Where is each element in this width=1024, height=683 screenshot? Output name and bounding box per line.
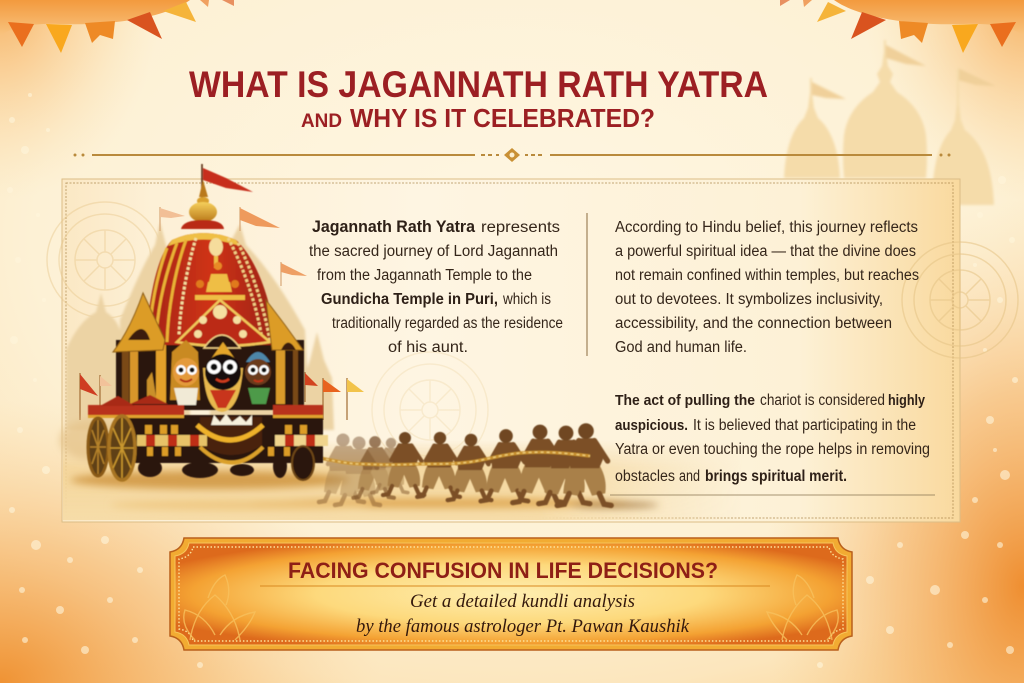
mandala: centre (372, 352, 488, 468)
dome (113, 233, 303, 352)
deity: Balabhadra (170, 340, 200, 405)
text block: pulling the chariot: and (679, 468, 700, 485)
faded pullers (319, 434, 380, 505)
text block: what it represents: the sacred journey of Lord Jagannath (309, 243, 558, 260)
mandala: right (902, 242, 1018, 358)
chariot flag (202, 164, 253, 200)
title line 1: WHAT IS JAGANNATH RATH YATRA (189, 64, 768, 105)
illustration: chariot (88, 164, 328, 480)
deity: Subhadra (245, 352, 271, 404)
text block: Hindu belief: According to Hindu belief, this journey reflects (615, 219, 918, 236)
temple silhouettes: top right (784, 40, 996, 205)
temple silhouettes behind chariot (66, 222, 334, 430)
text block: Hindu belief: a powerful spiritual idea — that the divine does (615, 243, 916, 260)
text block: what it represents: Jagannath Rath Yatra (312, 218, 476, 236)
banner heading: FACING CONFUSION IN LIFE DECISIONS? (288, 558, 718, 583)
ornamental divider (74, 148, 950, 162)
panel: main content frame (62, 179, 960, 522)
text block: what it represents: from the Jagannath Temple to the (317, 267, 532, 284)
text block: what it represents (309, 218, 563, 356)
text block: what it represents: of his aunt. (388, 339, 468, 356)
banner subtext: Get a detailed kundli analysis (410, 591, 635, 612)
title line 2: AND (301, 111, 342, 132)
lotus icon: left (184, 575, 255, 640)
text block: what it represents: Gundicha Temple in Puri, (321, 291, 498, 308)
bunting: top left (0, 0, 234, 53)
text block: Hindu belief: accessibility, and the connection between (615, 315, 892, 332)
text block: pulling the chariot: auspicious. (615, 417, 688, 434)
call to action banner (170, 538, 852, 650)
dome gable (177, 300, 270, 346)
bunting: top right (780, 0, 1024, 53)
text block: what it represents: represents (481, 219, 560, 236)
text block: Hindu belief (615, 219, 919, 356)
checked band (137, 435, 328, 446)
text block: pulling the chariot: The act of pulling the (615, 392, 755, 409)
wheels (88, 416, 314, 480)
rope (320, 452, 590, 465)
text block: pulling the chariot: It is believed that participating in the (693, 417, 916, 434)
text block: pulling the chariot: chariot is considered (760, 392, 885, 409)
lotus offerings (211, 414, 252, 425)
chariot base (88, 395, 328, 463)
banner subtext (356, 591, 690, 637)
lotus icon: right (767, 575, 838, 640)
dome finial (181, 180, 224, 229)
ground dust (60, 420, 743, 520)
side gables (113, 293, 165, 352)
front pullers (383, 423, 611, 505)
text block: Hindu belief: God and human life. (615, 339, 747, 356)
banner subtext: by the famous astrologer Pt. Pawan Kaushik (356, 616, 690, 637)
text block: pulling the chariot: obstacles (615, 468, 675, 485)
text block: Hindu belief: not remain confined within temples, but reaches (615, 267, 919, 284)
text block: Hindu belief: out to devotees. It symbolizes inclusivity, (615, 291, 883, 308)
text block: what it represents: which is (502, 291, 551, 308)
cabin (116, 340, 304, 410)
text block: pulling the chariot: Yatra or even touching the rope helps in removing (615, 441, 930, 458)
text block: pulling the chariot: highly (888, 392, 926, 409)
title (189, 61, 845, 137)
background flags (80, 207, 364, 420)
rope pullers (319, 423, 611, 505)
mandala: left (47, 202, 163, 318)
text block: pulling the chariot (615, 392, 930, 485)
garlands (197, 425, 263, 440)
title line 2: WHY IS IT CELEBRATED? (350, 103, 655, 133)
dome crest ornament (195, 238, 245, 300)
deity: Jagannath (203, 342, 243, 412)
text block: what it represents: traditionally regarded as the residence (332, 315, 563, 332)
text panel rules (290, 206, 935, 495)
mid pullers (353, 436, 408, 498)
text block: pulling the chariot: brings spiritual merit. (705, 468, 847, 485)
